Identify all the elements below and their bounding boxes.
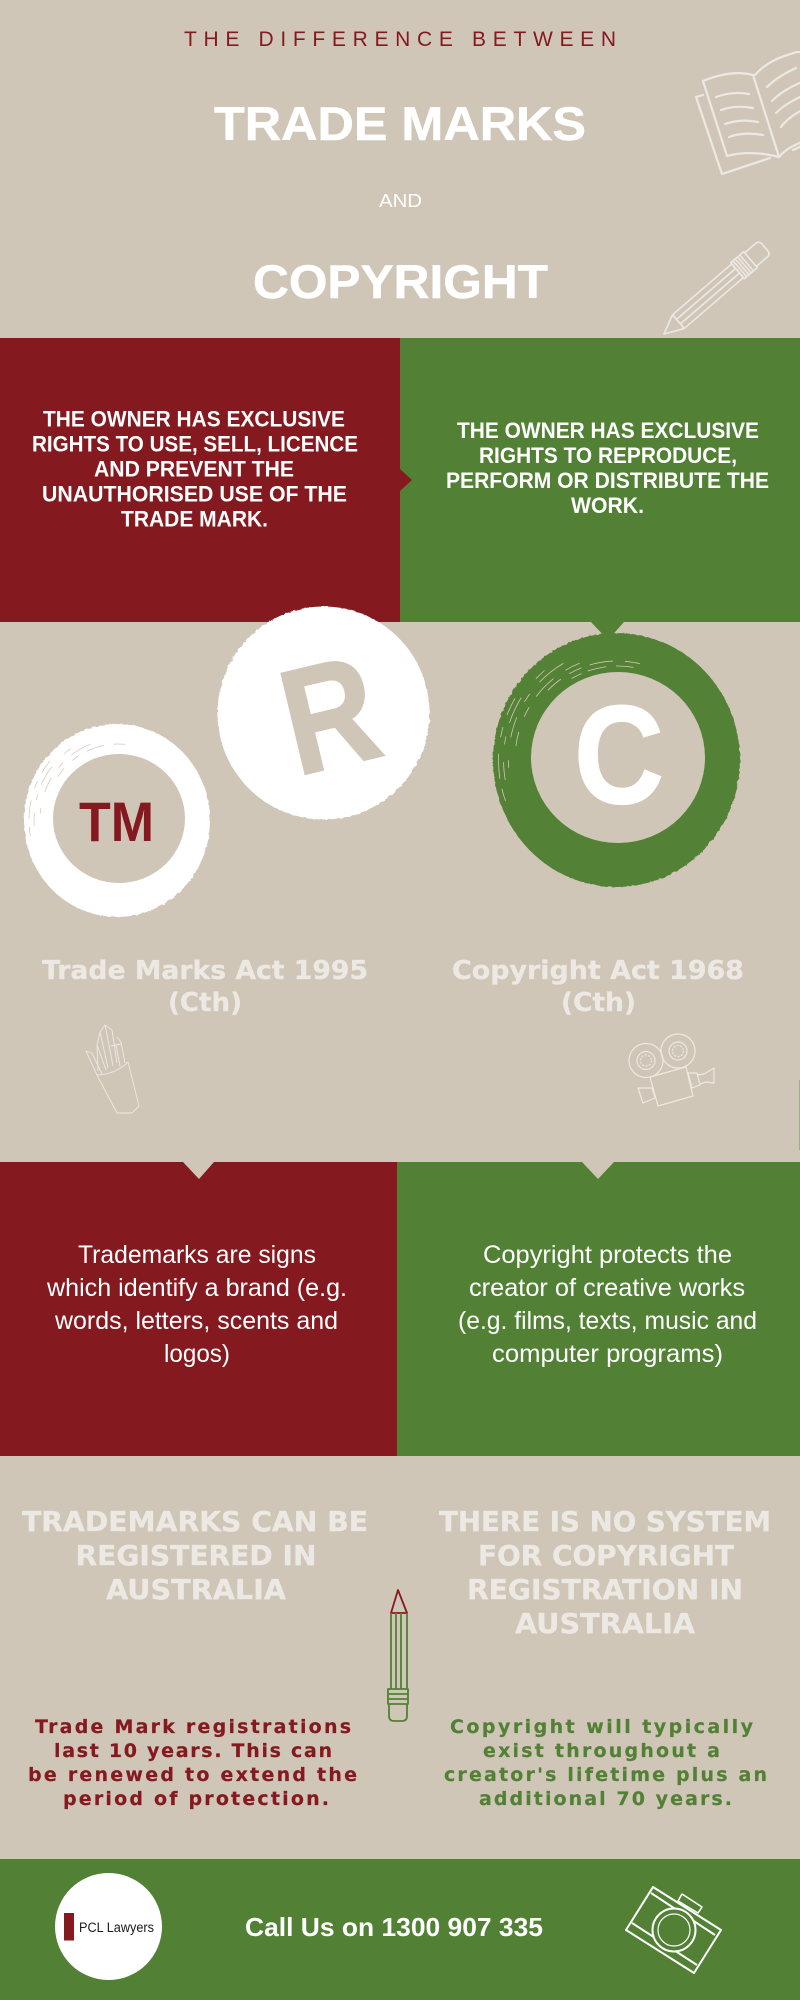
heading: copyright act: Copyright Act 1968 <box>452 956 744 986</box>
text: copyright owner rights: PERFORM OR DISTRIBUTE THE <box>446 468 769 493</box>
icon: pen cup <box>86 1025 139 1113</box>
logo: PCL Lawyers <box>55 1873 162 1980</box>
icon: copyright C brush ring: C <box>574 676 664 833</box>
pointer notch <box>183 1162 214 1179</box>
text: copyright owner rights <box>446 418 769 518</box>
text: copyright duration: exist throughout a <box>483 1740 720 1762</box>
text: trademarks definition: logos) <box>164 1340 230 1368</box>
text: trade mark owner rights: RIGHTS TO USE, SELL, LICENCE <box>32 432 358 456</box>
heading: no copyright registration: REGISTRATION IN <box>467 1573 743 1606</box>
text: trade mark duration: be renewed to extend the <box>28 1764 357 1786</box>
heading: trade marks act: (Cth) <box>168 988 242 1018</box>
icon: film projector <box>629 1034 714 1106</box>
text: trade mark owner rights: AND PREVENT THE <box>94 456 294 482</box>
icon: registered R brush circle <box>218 606 430 820</box>
panel: footer <box>0 1859 800 2000</box>
panel: copyright owner rights <box>400 338 800 640</box>
heading: trade marks act: Trade Marks Act 1995 <box>42 956 368 986</box>
text: copyright owner rights: RIGHTS TO REPRODUCE, <box>479 443 737 468</box>
text: copyright duration <box>444 1716 767 1810</box>
text: trademarks definition: which identify a brand (e.g. <box>46 1274 347 1302</box>
heading: trademarks can be registered: TRADEMARKS CAN BE <box>22 1505 368 1538</box>
title: copyright: COPYRIGHT <box>253 255 548 308</box>
text: copyright owner rights: WORK. <box>571 493 644 518</box>
icon: camera <box>626 1887 721 1973</box>
icon: copyright C brush ring <box>493 633 740 887</box>
heading: no copyright registration: THERE IS NO SYSTEM <box>439 1505 771 1538</box>
text: copyright definition: (e.g. films, texts, music and <box>458 1307 757 1335</box>
text: copyright definition <box>458 1241 757 1368</box>
text: copyright owner rights: THE OWNER HAS EXCLUSIVE <box>457 418 759 443</box>
title: the difference between: THE DIFFERENCE BETWEEN <box>184 28 616 51</box>
heading: no copyright registration: FOR COPYRIGHT <box>478 1539 734 1572</box>
logo: PCL Lawyers: PCL Lawyers <box>79 1920 154 1935</box>
text: trade mark duration: Trade Mark registrations <box>35 1716 351 1738</box>
text: copyright definition: computer programs) <box>492 1340 723 1368</box>
title: trade marks: TRADE MARKS <box>214 97 586 150</box>
panel: trade mark owner rights <box>0 338 400 622</box>
text: trademarks definition: words, letters, scents and <box>54 1307 338 1335</box>
heading: copyright act <box>452 956 744 1018</box>
edge sliver <box>799 1080 800 1150</box>
text: trade mark owner rights: TRADE MARK. <box>121 506 268 532</box>
text: copyright duration: Copyright will typically <box>450 1716 754 1738</box>
heading: trademarks can be registered <box>22 1505 368 1606</box>
heading: trademarks can be registered: REGISTERED IN <box>76 1539 316 1572</box>
text: call us: Call Us on 1300 907 335 <box>245 1912 543 1942</box>
icon: green pencil <box>388 1590 408 1721</box>
text: trade mark duration: last 10 years. This can <box>54 1740 332 1762</box>
text: trade mark duration: period of protection. <box>63 1788 329 1810</box>
panel: copyright definition <box>397 1162 800 1456</box>
text: trade mark owner rights: UNAUTHORISED USE OF THE <box>42 482 347 506</box>
text: copyright definition: Copyright protects the <box>483 1241 732 1269</box>
title block <box>184 28 616 308</box>
panel: trademarks definition <box>0 1162 397 1456</box>
heading: no copyright registration: AUSTRALIA <box>515 1607 695 1640</box>
heading: trademarks can be registered: AUSTRALIA <box>106 1573 286 1606</box>
text: trade mark duration <box>28 1716 357 1810</box>
icon: TM brush ring: TM <box>79 790 154 853</box>
icon: open book <box>696 52 800 174</box>
heading: trade marks act <box>42 956 368 1018</box>
text: copyright definition: creator of creative works <box>469 1274 745 1302</box>
icon: pencil <box>657 239 772 342</box>
text: trademarks definition: Trademarks are signs <box>78 1241 316 1269</box>
icon: registered R brush circle: R <box>265 622 394 807</box>
text: copyright duration: additional 70 years. <box>479 1788 732 1810</box>
arrow: green panel pointer <box>591 622 624 640</box>
text: trade mark owner rights: THE OWNER HAS EXCLUSIVE <box>43 406 345 432</box>
title: and: AND <box>379 191 422 211</box>
heading: no copyright registration <box>439 1505 771 1640</box>
arrow: red panel pointer <box>400 469 412 491</box>
pointer notch <box>582 1162 614 1179</box>
text: trademarks definition <box>46 1241 347 1368</box>
heading: copyright act: (Cth) <box>561 988 636 1018</box>
text: copyright duration: creator's lifetime plus an <box>444 1764 767 1786</box>
text: trade mark owner rights <box>32 406 358 532</box>
icon: TM brush ring <box>24 724 210 917</box>
